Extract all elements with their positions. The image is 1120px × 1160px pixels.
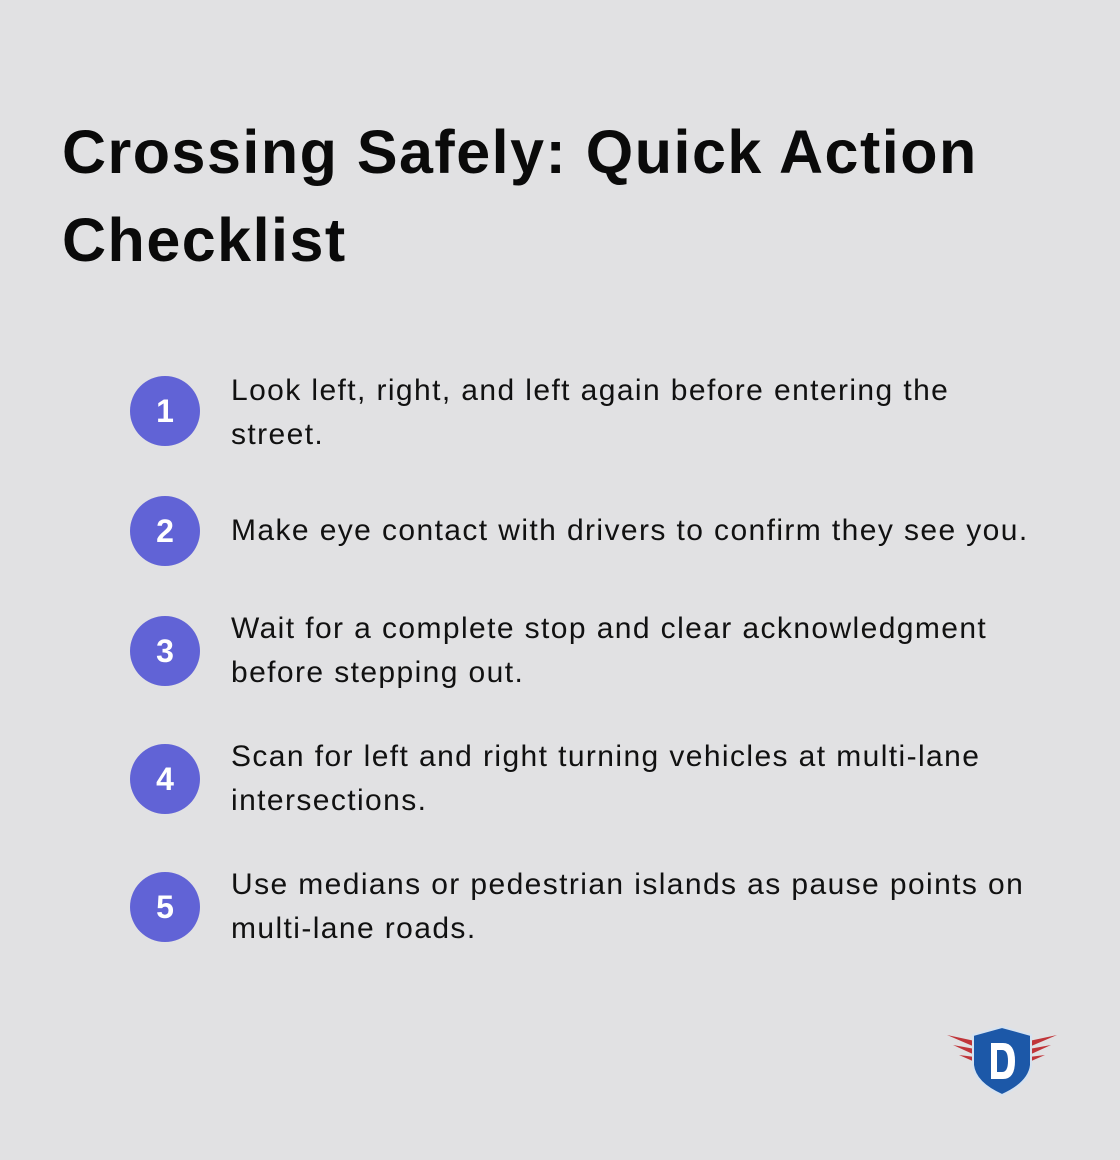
item 5: multi-lane roads. bbox=[231, 912, 477, 945]
item 4: intersections. bbox=[231, 784, 427, 817]
item 1 bbox=[130, 374, 949, 451]
item 1: street. bbox=[231, 418, 324, 451]
item 4: Scan for left and right turning vehicles at multi-lane bbox=[231, 740, 980, 773]
item 3: 3 bbox=[156, 633, 174, 669]
item 5: Use medians or pedestrian islands as pause points on bbox=[231, 868, 1024, 901]
item 4: 4 bbox=[156, 761, 174, 797]
title: Checklist bbox=[62, 206, 347, 274]
item 3: before stepping out. bbox=[231, 656, 524, 689]
item 2: 2 bbox=[156, 513, 174, 549]
item 2: Make eye contact with drivers to confirm they see you. bbox=[231, 514, 1029, 547]
title: Crossing Safely: Quick Action bbox=[62, 118, 978, 186]
icon: logo bbox=[947, 1026, 1057, 1096]
item 3: Wait for a complete stop and clear acknowledgment bbox=[231, 612, 987, 645]
item 1: Look left, right, and left again before entering the bbox=[231, 374, 949, 407]
item 5: 5 bbox=[156, 889, 174, 925]
item 1: 1 bbox=[156, 393, 174, 429]
title bbox=[62, 118, 978, 274]
item 4 bbox=[130, 740, 980, 817]
item 2 bbox=[130, 496, 1029, 566]
item 3 bbox=[130, 612, 987, 689]
item 5 bbox=[130, 868, 1024, 945]
